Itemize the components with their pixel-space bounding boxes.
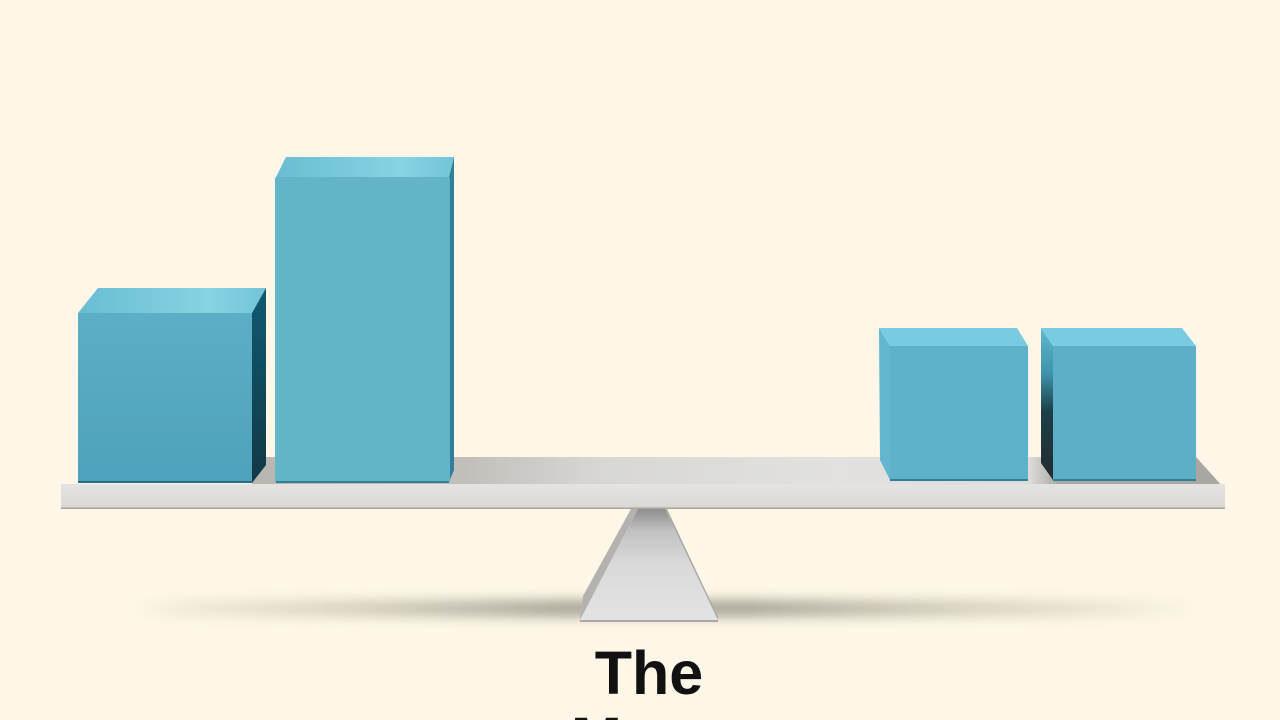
left side face [1041, 328, 1053, 480]
front face [890, 346, 1028, 480]
dark side face [252, 288, 266, 483]
fulcrum front face [580, 509, 718, 620]
plank front edge [61, 484, 1225, 509]
top face [276, 157, 454, 177]
front face [78, 313, 252, 482]
small cube, left [78, 288, 266, 483]
seesaw plank [61, 457, 1225, 509]
fulcrum base edge [580, 620, 718, 622]
fulcrum left facet [580, 509, 638, 620]
tall block, left [275, 157, 454, 483]
side face [449, 157, 454, 482]
top face [78, 288, 266, 313]
front face [275, 177, 450, 482]
top face [879, 328, 1028, 346]
fulcrum right edge [665, 509, 718, 620]
fulcrum [580, 509, 718, 622]
front face [1053, 346, 1196, 480]
plank top surface [252, 457, 1224, 488]
cube, right 2 [1041, 328, 1196, 481]
top face [1041, 328, 1196, 346]
title: The [595, 639, 703, 707]
ground shadow [130, 600, 1200, 617]
left side face [879, 328, 890, 480]
cube, right 1 [879, 328, 1028, 481]
